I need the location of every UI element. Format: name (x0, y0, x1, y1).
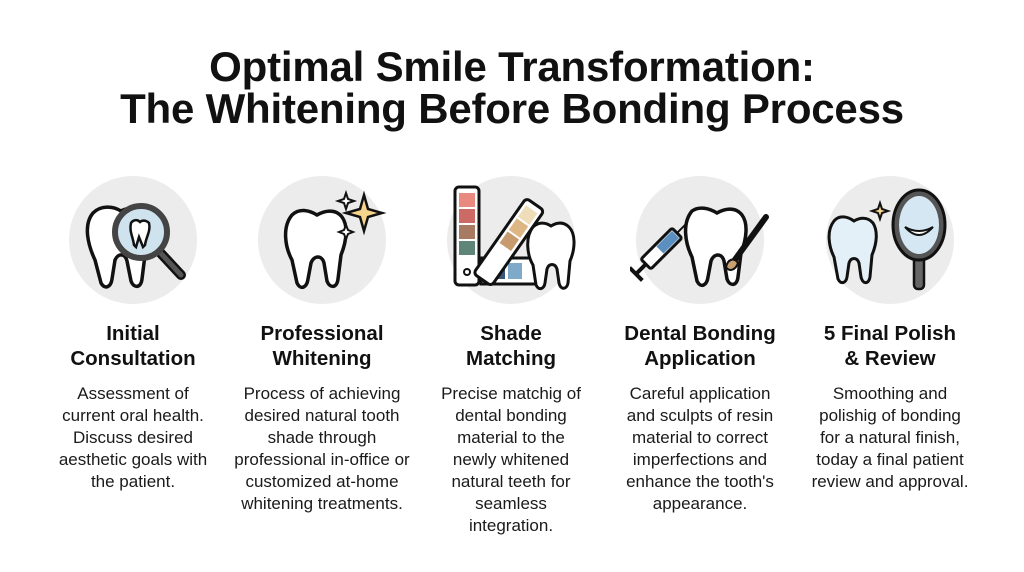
panel: step 1: aesthetic goals with (59, 450, 207, 469)
panel: step 3: seamless (475, 494, 547, 513)
panel: step 1: current oral health. (62, 406, 204, 425)
panel: step 2: professional in-office or (234, 450, 410, 469)
panel: step 4: material to correct (632, 428, 768, 447)
icon: syringe, tooth and brush (630, 176, 769, 304)
panel: step 4: appearance. (653, 494, 747, 513)
panel: step 3: Matching (466, 347, 556, 370)
panel: step 4: and sculpts of resin (627, 406, 773, 425)
panel: step 2: Process of achieving (244, 384, 400, 403)
panel: step 4 (624, 176, 776, 513)
panel: step 2: shade through (268, 428, 376, 447)
icon: shade guide and tooth (447, 176, 576, 304)
panel: step 3 (441, 176, 581, 535)
panel: step 4: Dental Bonding (624, 322, 776, 345)
panel: step 5: for a natural finish, (820, 428, 960, 447)
title: The Whitening Before Bonding Process (120, 85, 904, 132)
panel: step 3: natural teeth for (451, 472, 571, 491)
panel: step 5: polishig of bonding (819, 406, 961, 425)
panel: step 2: Whitening (272, 347, 372, 370)
panel: step 1: Assessment of (77, 384, 189, 403)
panel: step 2 (234, 176, 410, 513)
panel: step 4: enhance the tooth's (626, 472, 774, 491)
icon: sparkling tooth (258, 176, 386, 304)
icon: tooth and mirror (826, 176, 954, 304)
panel: step 5: review and approval. (812, 472, 968, 491)
panel: step 2: customized at-home (245, 472, 399, 491)
panel: step 4: Application (644, 347, 756, 370)
panel: step 5: Smoothing and (833, 384, 947, 403)
title (120, 43, 904, 132)
panel: step 4: imperfections and (633, 450, 767, 469)
panel: step 5: & Review (844, 347, 936, 370)
icon: tooth with magnifier (69, 176, 197, 304)
panel: step 2: Professional (260, 322, 384, 345)
panel: step 2: whitening treatments. (241, 494, 403, 513)
panel: step 1: Initial (106, 322, 160, 345)
panel: step 4: Careful application (630, 384, 770, 403)
panel: step 1: the patient. (91, 472, 175, 491)
panel: step 3: dental bonding (455, 406, 567, 425)
panel: step 3: Precise matchig of (441, 384, 581, 403)
panel: step 3: Shade (480, 322, 542, 345)
panel: step 5: 5 Final Polish (824, 322, 956, 345)
title: Optimal Smile Transformation: (209, 43, 815, 90)
panel: step 1: Consultation (70, 347, 196, 370)
panel: step 5 (812, 176, 968, 491)
panel: step 2: desired natural tooth (244, 406, 400, 425)
panel: step 3: integration. (469, 516, 553, 535)
panel: step 3: newly whitened (453, 450, 569, 469)
panel: step 1: Discuss desired (73, 428, 193, 447)
panel: step 1 (59, 176, 207, 491)
panel: step 3: material to the (457, 428, 565, 447)
panel: step 5: today a final patient (816, 450, 964, 469)
